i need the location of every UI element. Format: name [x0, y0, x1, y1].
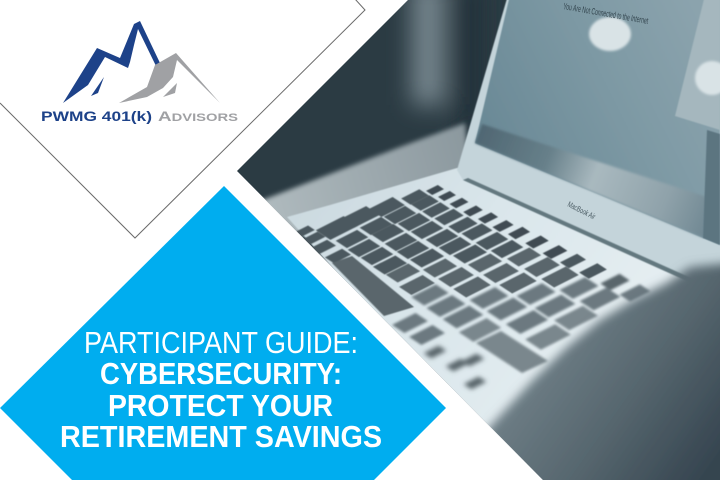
icon: gray mountain: [119, 53, 220, 103]
arrow keys: [424, 346, 486, 389]
screen glare spots: [589, 17, 720, 95]
panel: laptop photo: [230, 0, 720, 480]
heading: cybersecurity: CYBERSECURITY:: [100, 356, 342, 391]
logo text: PWMG 401(k): [41, 108, 152, 124]
heading: protect your: PROTECT YOUR: [108, 388, 333, 423]
panel: logo outline diamond: [0, 0, 365, 238]
hand in foreground: [485, 262, 720, 480]
keyboard: out-of-focus keys: [392, 274, 650, 373]
dock strip: [475, 124, 707, 238]
title: [60, 325, 382, 454]
keyboard: sharp keys: [295, 185, 607, 316]
heading: retirement savings: RETIREMENT SAVINGS: [60, 419, 382, 454]
logo: PWMG 401(k) Advisors: [41, 21, 238, 124]
laptop base: [287, 168, 720, 480]
panel: blue title diamond: [0, 186, 446, 480]
hinge: [463, 178, 687, 280]
laptop screen bezel: [457, 0, 720, 293]
heading: participant guide: PARTICIPANT GUIDE:: [84, 325, 358, 360]
laptop label: MacBook Air: [566, 200, 597, 222]
screen message: You Are Not Connected to the Internet: [563, 1, 649, 26]
desk surface: [255, 123, 470, 240]
logo text: advisors: A DVISORS: [158, 108, 238, 124]
laptop screen: [475, 0, 720, 245]
icon: blue mountain: [63, 21, 160, 103]
menu panel: [675, 0, 720, 130]
